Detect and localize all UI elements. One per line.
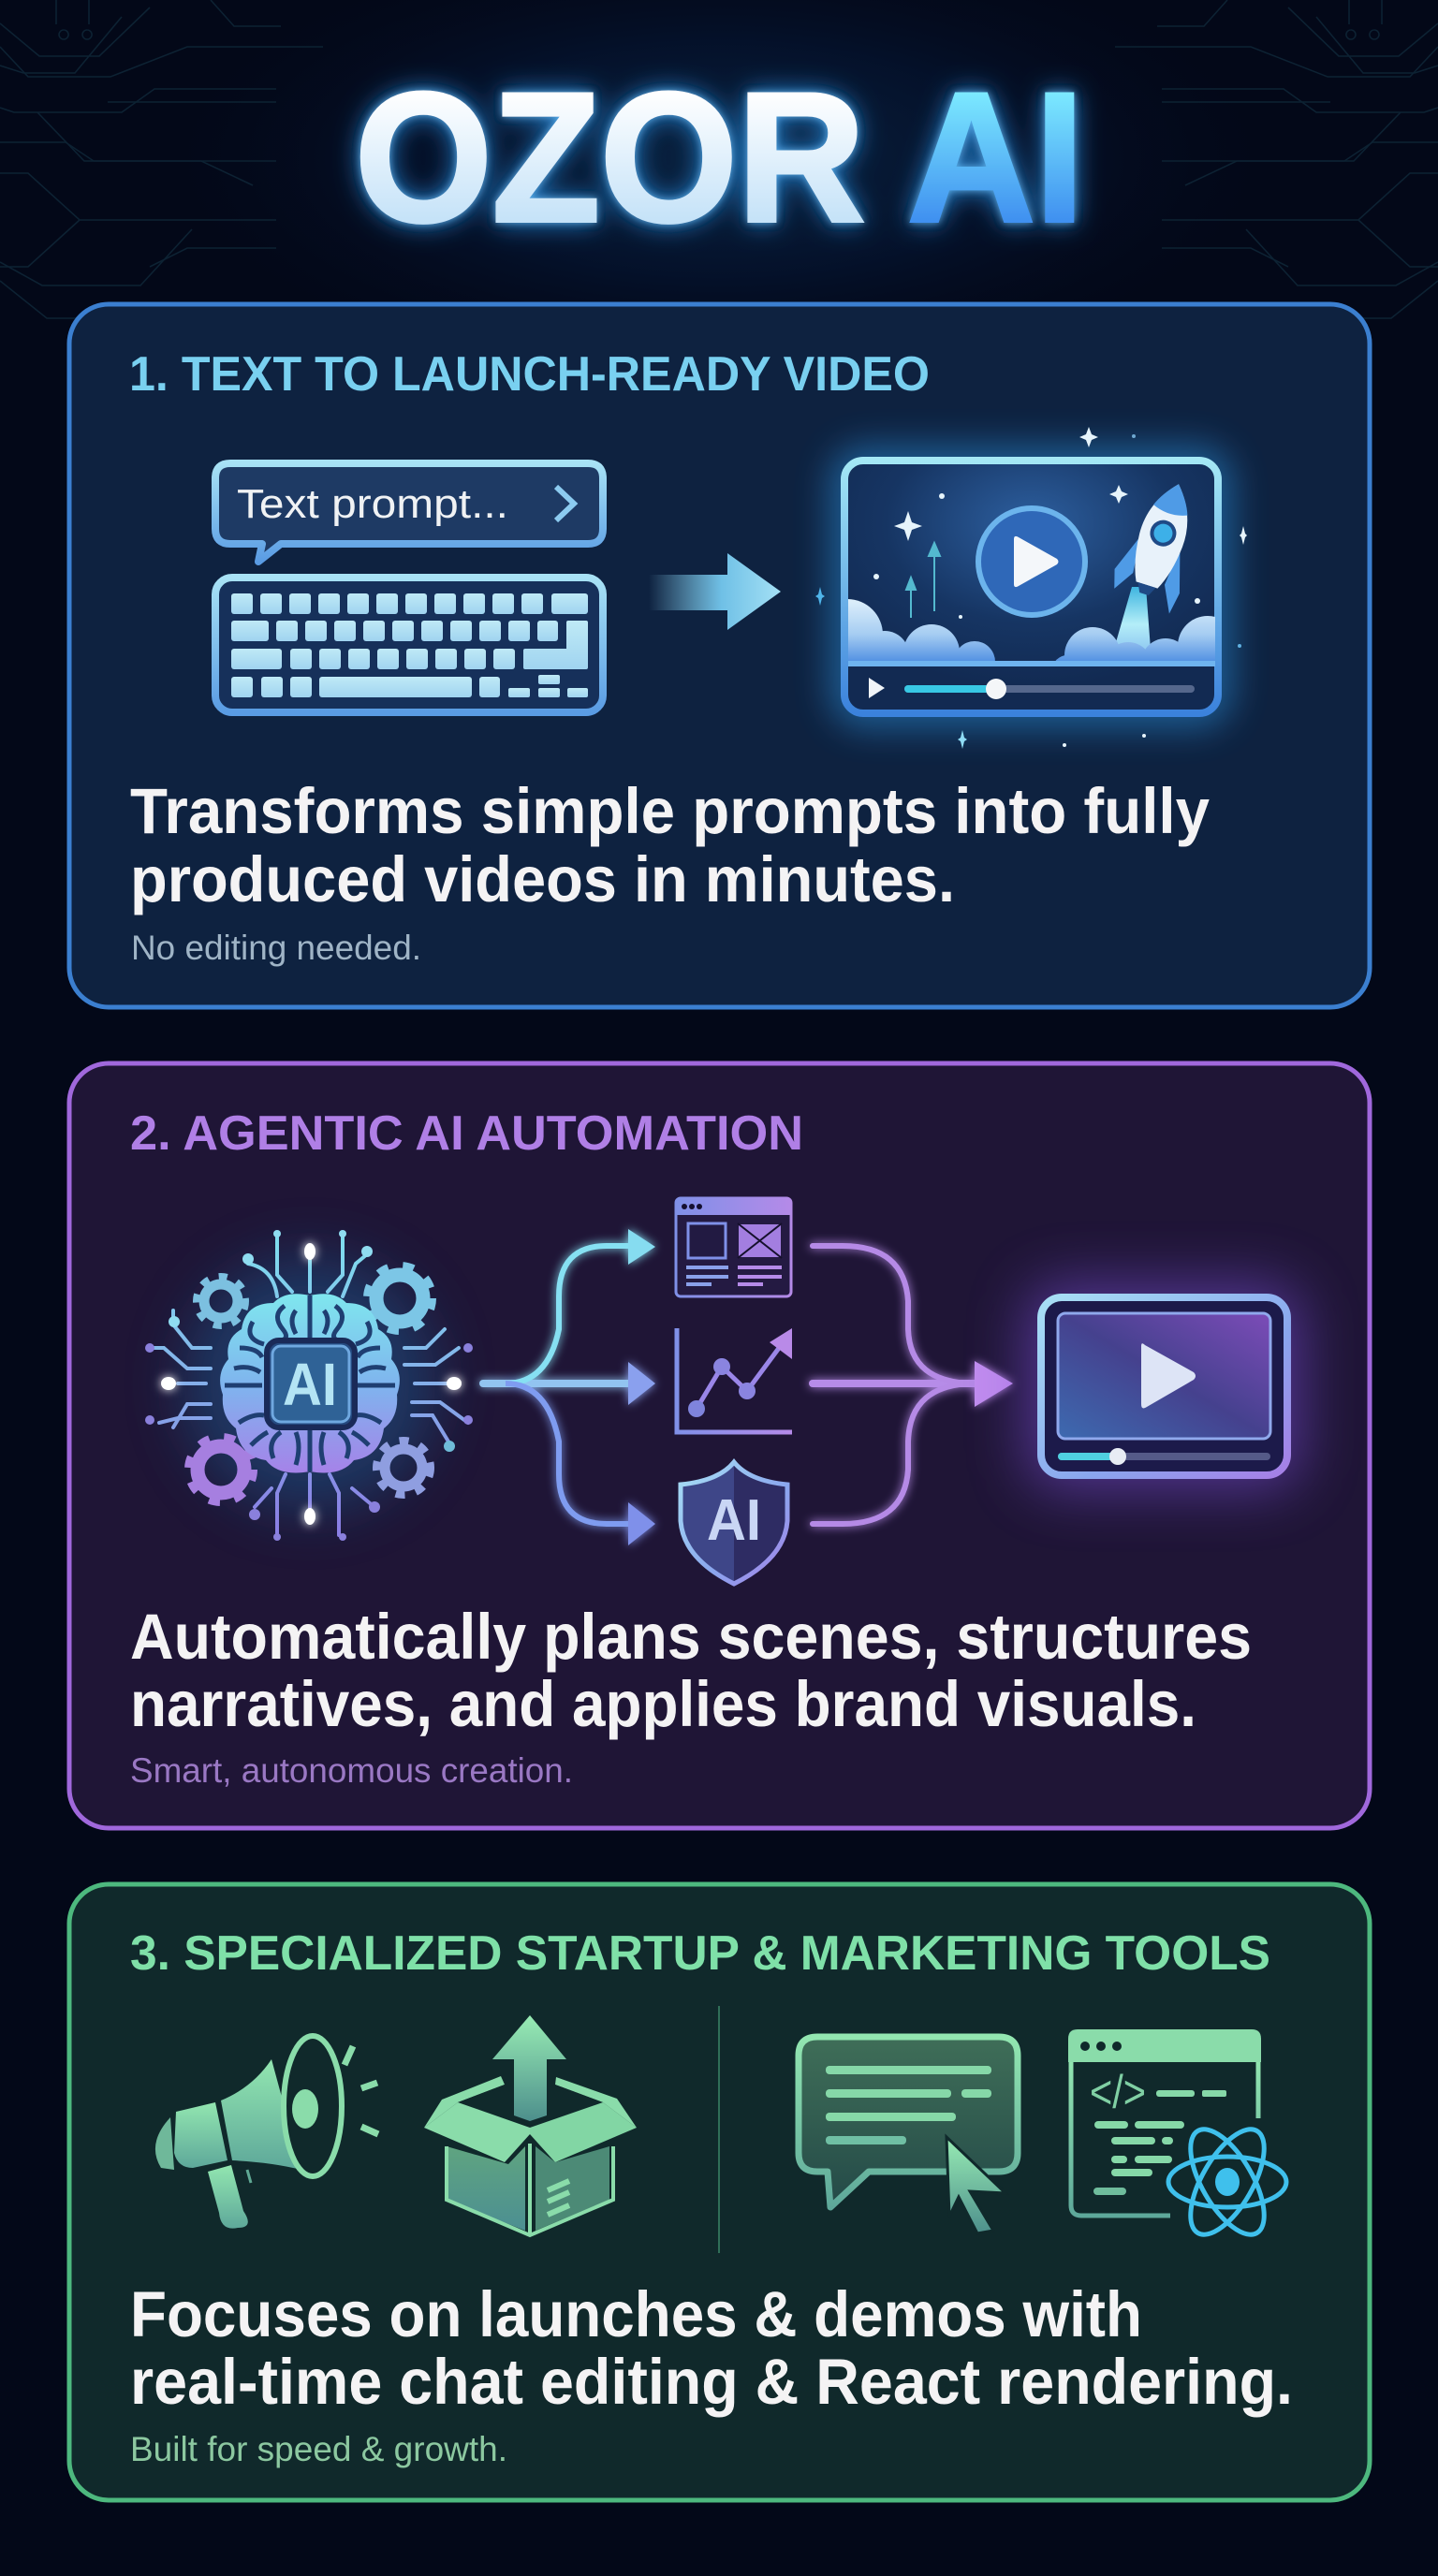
icon: AI shield: AI	[707, 1488, 761, 1553]
sparkles	[815, 427, 1247, 749]
panel: text to launch-ready video	[69, 304, 1370, 1007]
divider	[718, 2006, 720, 2253]
player glow	[829, 445, 1234, 729]
illustration: AI brain	[145, 1230, 473, 1541]
icon: React atom	[1168, 2118, 1286, 2246]
code tag: </>	[1090, 2066, 1146, 2118]
panel 1 body text	[130, 775, 1210, 915]
icon: growth chart	[677, 1328, 792, 1432]
circuit traces	[152, 1236, 468, 1535]
panel 1 heading: 1. TEXT TO LAUNCH-READY VIDEO	[129, 347, 930, 402]
brain halo	[183, 1257, 436, 1510]
panel 2 note: Smart, autonomous creation.	[130, 1751, 573, 1790]
title glow backdrop	[139, 0, 1299, 393]
circuit pattern: top left	[0, 0, 323, 318]
chevron	[556, 487, 574, 520]
up arrow	[492, 2015, 566, 2121]
illustration: launch video player	[812, 427, 1247, 749]
box label lines	[548, 2181, 569, 2215]
play button	[978, 508, 1085, 615]
panel 3 body text	[130, 2278, 1293, 2418]
icon: layout window	[676, 1198, 791, 1296]
illustration: keyboard	[215, 578, 603, 712]
arrows: AI to three outputs	[483, 1229, 655, 1545]
panel 3 heading: 3. SPECIALIZED STARTUP & MARKETING TOOLS	[130, 1926, 1270, 1981]
box body	[447, 2146, 525, 2231]
icon: megaphone	[155, 2036, 378, 2229]
prompt text: Text prompt...	[237, 481, 508, 527]
panel: specialized startup and marketing tools	[69, 1884, 1370, 2500]
AI chip: AI	[283, 1351, 337, 1418]
illustration: text prompt bubble	[215, 463, 603, 562]
panel 1 note: No editing needed.	[131, 929, 421, 967]
panel: agentic AI automation	[69, 1063, 1370, 1828]
circuit pattern: top right	[1115, 0, 1438, 318]
arrow: prompt to video	[649, 553, 781, 630]
AI chip	[267, 1340, 355, 1427]
panel 2 body text: Automatically plans scenes, structures	[130, 1601, 1252, 1673]
illustration: output video player	[1025, 1282, 1302, 1490]
box flaps	[424, 2102, 530, 2162]
icon: code window with React atom	[1068, 2029, 1286, 2246]
rocket flame	[1110, 587, 1152, 662]
icon: AI shield	[681, 1462, 787, 1584]
panel 2 body text: narratives, and applies brand visuals.	[130, 1668, 1196, 1740]
brain lobes	[220, 1294, 400, 1473]
icon: chat bubble with cursor	[799, 2037, 1018, 2233]
up arrows	[906, 543, 940, 618]
rocket	[1107, 474, 1211, 615]
circuit nodes	[145, 1230, 473, 1541]
panel 1 body text: produced videos in minutes.	[130, 843, 955, 915]
panel 3 note: Built for speed & growth.	[130, 2430, 507, 2468]
icon: product box with up arrow	[424, 2015, 637, 2235]
gears	[188, 1266, 433, 1502]
panel 3 body text: real-time chat editing & React rendering.	[130, 2346, 1293, 2418]
arrows: outputs merge to video	[813, 1246, 1013, 1524]
clouds	[848, 599, 1215, 661]
player controls	[869, 678, 1195, 699]
panel 2 heading: 2. AGENTIC AI AUTOMATION	[130, 1106, 803, 1161]
box back rim	[424, 2076, 637, 2128]
title: OZOR AI	[355, 54, 1084, 260]
panel 2 body text	[130, 1601, 1252, 1740]
box opening	[458, 2085, 603, 2128]
panel 3 body text: Focuses on launches & demos with	[130, 2278, 1142, 2350]
panel 1 body text: Transforms simple prompts into fully	[130, 775, 1210, 847]
video glow	[1025, 1282, 1302, 1490]
